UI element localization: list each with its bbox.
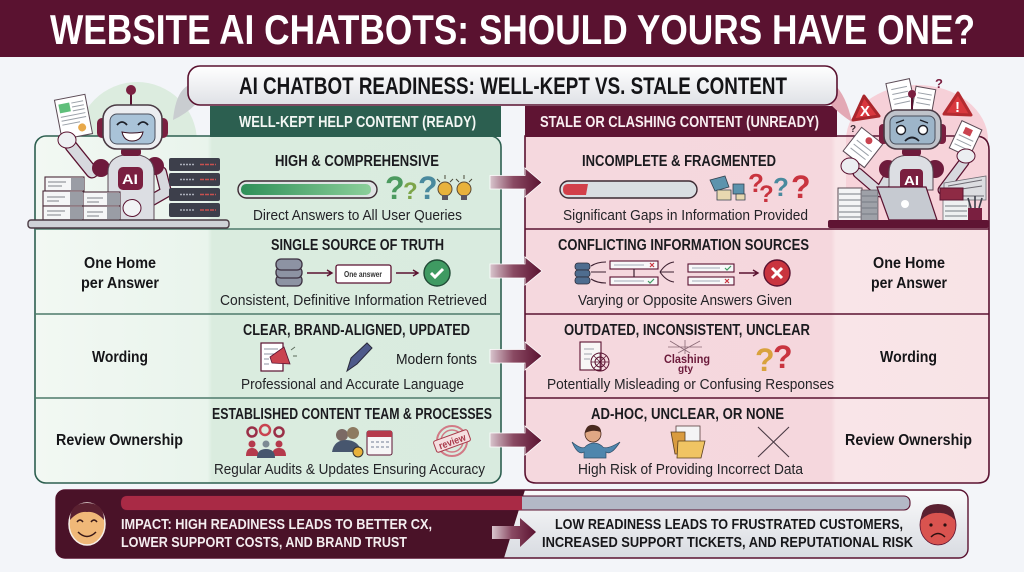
row label right: one home per answer (871, 255, 947, 292)
ready row 3: wording (241, 322, 477, 393)
question mark accent small: ? (850, 124, 856, 135)
warning sign left (853, 96, 879, 120)
question marks: ? (755, 342, 775, 378)
raised hand (58, 132, 76, 148)
clashing type icon (664, 340, 710, 375)
server rack (169, 158, 220, 217)
pencil cup (968, 196, 982, 221)
backdrop: pink arch behind right robot (846, 85, 988, 228)
AI chest badge: AI (904, 173, 919, 188)
row label left: review ownership: Review Ownership (56, 432, 183, 449)
torso (889, 155, 933, 190)
unready row 2: conflicting sources (558, 237, 809, 309)
laptop (877, 187, 937, 220)
ears (879, 124, 888, 144)
sad face (920, 504, 956, 545)
subtitle pill (188, 66, 837, 105)
document megaphone icon (261, 343, 297, 371)
flying paper top (886, 79, 916, 114)
neck (121, 148, 141, 156)
speech tail right (830, 84, 852, 122)
unready row 3: wording: OUTDATED, INCONSISTENT, UNCLEAR (564, 322, 810, 339)
unready row 4: review ownership: High Risk of Providing Incorrect Data (578, 462, 804, 478)
review stamp icon: review (437, 432, 468, 452)
impact text bad: LOW READINESS LEADS TO FRUSTRATED CUSTOMERS, (555, 516, 903, 533)
unready row 3: wording (547, 322, 834, 393)
red question marks: ? (748, 168, 764, 198)
unready row 2: conflicting sources: Varying or Opposite Answers Given (578, 293, 792, 309)
dark half (56, 490, 525, 558)
flow arrow (739, 270, 758, 276)
impact text bad (542, 516, 913, 551)
team gears icon (246, 425, 286, 458)
red question marks: ? (791, 169, 811, 205)
question marks and bulbs (385, 170, 472, 206)
head (103, 105, 162, 149)
shaking hand (123, 200, 141, 216)
panel body (525, 136, 989, 483)
paper stack right (940, 176, 986, 221)
desk shelf (28, 220, 229, 228)
antenna (911, 96, 913, 110)
second flying paper (912, 86, 936, 115)
red question marks: ? (759, 181, 774, 208)
database icon (276, 259, 302, 286)
unready row 2: conflicting sources: CONFLICTING INFORMATION SOURCES (558, 237, 809, 254)
document cobweb icon (580, 342, 609, 371)
branching arrows (591, 262, 674, 283)
ready row 1: coverage: HIGH & COMPREHENSIVE (275, 153, 439, 170)
flow arrow one (307, 270, 332, 276)
impact arrow (492, 518, 536, 547)
question marks: ? (773, 339, 793, 375)
column header (525, 106, 837, 137)
AI chest badge (900, 169, 923, 191)
torso (108, 154, 154, 220)
impact text good (121, 516, 432, 551)
impact text good: LOWER SUPPORT COSTS, AND BRAND TRUST (121, 534, 407, 551)
face screen (890, 116, 935, 144)
hands (841, 158, 859, 174)
ready row 1: coverage (238, 153, 472, 224)
arrow row 4 (490, 426, 542, 455)
row label right: one home per answer: per Answer (871, 275, 947, 292)
one answer box (336, 265, 391, 283)
ready row 1: coverage: Direct Answers to All User Queries (253, 208, 462, 224)
row label left: one home per answer (81, 255, 159, 292)
ready row 2: single source of truth: Consistent, Definitive Information Retrieved (220, 293, 487, 309)
row label left: one home per answer: One Home (84, 255, 156, 272)
question marks and bulbs: ? (418, 170, 438, 206)
ready row 2: single source of truth: SINGLE SOURCE OF TRUTH (271, 237, 444, 254)
panel: stale content (525, 106, 989, 483)
impact banner (56, 490, 968, 558)
panel: well-kept content (35, 106, 501, 483)
sad face (896, 120, 928, 141)
row label left: one home per answer: per Answer (81, 275, 159, 292)
progress bar low (560, 181, 697, 198)
row label left: wording: Wording (92, 349, 148, 366)
check icon (424, 260, 450, 286)
row label right: wording: Wording (880, 349, 937, 366)
database icon (575, 263, 590, 284)
warning sign right (944, 93, 971, 116)
puzzle pieces (710, 176, 745, 200)
warning sign right: ! (955, 99, 960, 116)
folder icon (671, 426, 705, 458)
impact text bad: INCREASED SUPPORT TICKETS, AND REPUTATIONAL RISK (542, 534, 913, 551)
raised arm (71, 146, 92, 172)
ready row 3: wording: Professional and Accurate Language (241, 377, 464, 393)
pen icon (347, 343, 372, 371)
lower arm (138, 172, 166, 208)
arrow row 1 (490, 168, 542, 197)
readiness meter (121, 496, 910, 510)
red question marks: ? (773, 172, 789, 202)
ready row 4: review ownership (212, 406, 492, 478)
paper stack left (838, 188, 878, 221)
unready row 1: coverage (560, 153, 811, 224)
ready row 4: review ownership: Regular Audits & Updates Ensuring Accuracy (214, 462, 486, 478)
desk (828, 220, 989, 228)
backdrop: pink fill behind right robot over panel (846, 137, 988, 220)
answer boxes (610, 261, 734, 285)
AI chest badge (118, 167, 143, 190)
face screen (110, 114, 155, 144)
antenna (130, 94, 132, 106)
ready row 4: review ownership: ESTABLISHED CONTENT TEAM & PROCESSES (212, 406, 492, 423)
illustration: stressed robot with papers and laptop (828, 76, 989, 228)
left floating paper (843, 127, 883, 168)
column header: WELL-KEPT HELP CONTENT (READY) (239, 114, 476, 131)
ready row 2: single source of truth (220, 237, 487, 309)
speech tail left (173, 84, 196, 120)
impact text good: IMPACT: HIGH READINESS LEADS TO BETTER CX, (121, 516, 432, 533)
warning sign left: X (860, 103, 870, 120)
review stamp icon (433, 426, 471, 456)
light half (56, 490, 968, 558)
row label right: one home per answer: One Home (873, 255, 945, 272)
clashing type icon: Clashing (664, 352, 710, 366)
panel body (35, 136, 501, 483)
AI chest badge: AI (122, 171, 138, 187)
column header: STALE OR CLASHING CONTENT (UNREADY) (540, 114, 819, 131)
backdrop: green circle behind left robot (77, 82, 197, 202)
modern fonts label: Modern fonts (396, 351, 477, 368)
red question marks (748, 168, 811, 208)
paper stacks (43, 177, 120, 220)
progress bar full (238, 181, 377, 198)
stack sides (70, 178, 120, 219)
right floating paper (949, 121, 982, 157)
unready row 3: wording: Potentially Misleading or Confusing Responses (547, 377, 834, 393)
shrugging person icon (572, 425, 620, 458)
question marks (755, 339, 793, 378)
people calendar icon (332, 427, 392, 457)
arrow row 2 (490, 257, 542, 285)
empty cross icon (758, 427, 789, 457)
unready row 1: coverage: Significant Gaps in Information Provided (563, 208, 808, 224)
arms (858, 173, 888, 192)
ready row 3: wording: CLEAR, BRAND-ALIGNED, UPDATED (243, 322, 470, 339)
one answer box: One answer (344, 269, 383, 279)
certificate document (54, 94, 93, 139)
illustration: happy robot with documents and servers (28, 85, 229, 228)
answer box details (614, 263, 731, 283)
unready row 1: coverage: INCOMPLETE & FRAGMENTED (582, 153, 776, 170)
column header (210, 106, 501, 137)
arrow row 3 (490, 342, 542, 370)
stack text lines (47, 182, 103, 216)
fail icon (764, 260, 790, 286)
happy face (69, 503, 105, 545)
unready row 4: review ownership (572, 406, 804, 478)
shoulders (879, 160, 897, 178)
head (884, 110, 941, 149)
shoulders (146, 157, 164, 175)
neck (902, 148, 921, 156)
question marks and bulbs: ? (385, 170, 405, 206)
question marks and bulbs: ? (403, 178, 418, 205)
row label right: review ownership: Review Ownership (845, 432, 972, 449)
clashing type icon: gty (678, 364, 693, 375)
flow arrow two (396, 270, 418, 276)
subtitle pill: AI CHATBOT READINESS: WELL-KEPT VS. STALE CONTENT (239, 73, 787, 100)
question mark accent: ? (935, 76, 943, 91)
unready row 4: review ownership: AD-HOC, UNCLEAR, OR NONE (591, 406, 784, 423)
eyes and smile (117, 122, 148, 125)
ears (97, 118, 107, 138)
